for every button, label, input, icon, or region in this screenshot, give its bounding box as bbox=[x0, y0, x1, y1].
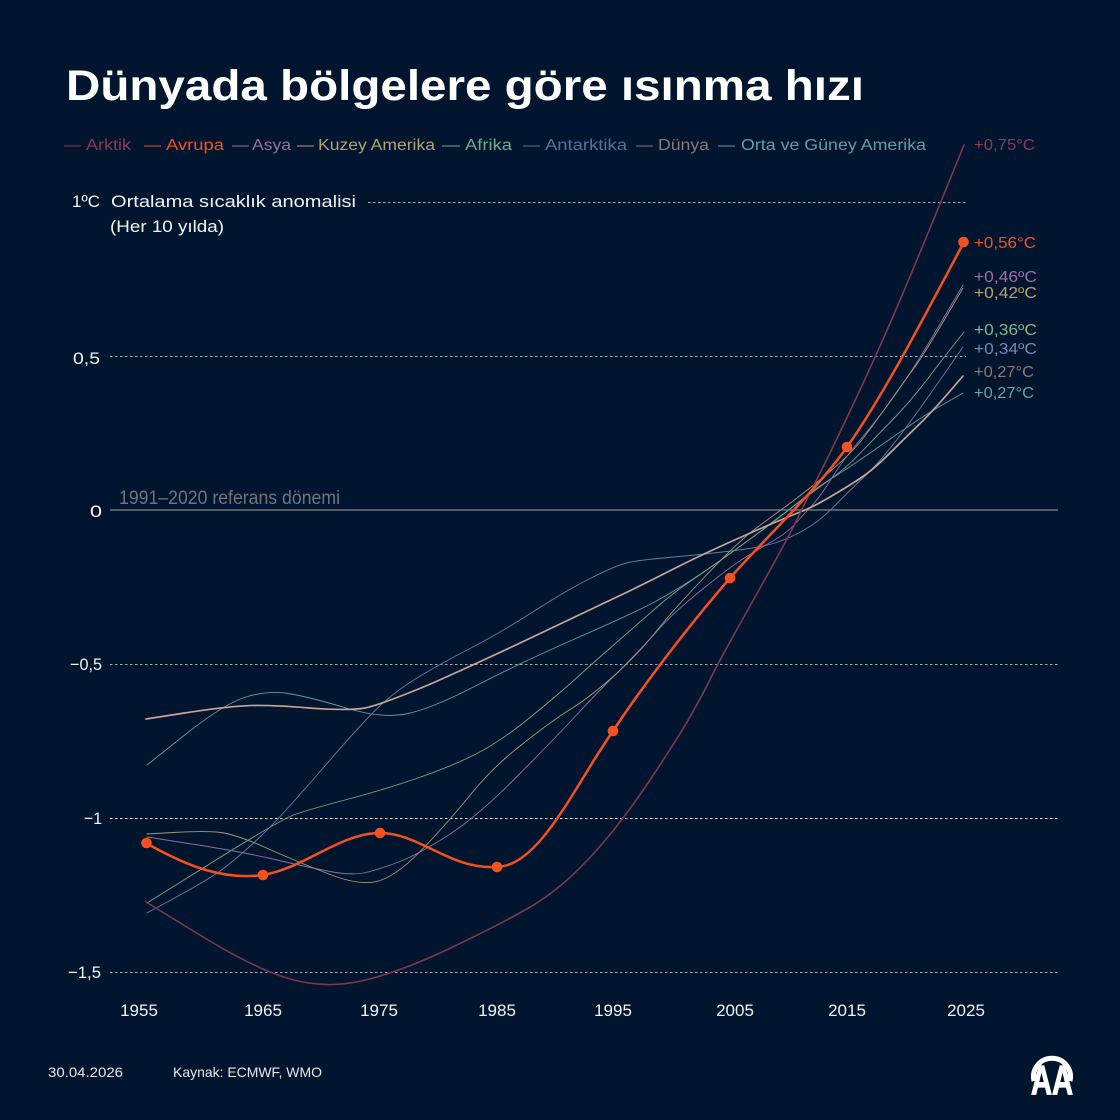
x axis labels: 1995 bbox=[594, 1001, 632, 1020]
end value labels: +0,27°C bbox=[974, 364, 1034, 381]
line: Avrupa bbox=[146, 242, 964, 876]
line: Asya bbox=[147, 285, 963, 874]
legend: Antarktika: Antarktika bbox=[545, 137, 627, 154]
x axis labels: 1985 bbox=[478, 1001, 516, 1020]
line: Orta ve Güney Amerika bbox=[147, 393, 963, 765]
legend: Dünya: Dünya bbox=[658, 137, 709, 154]
data points: Avrupa bbox=[141, 237, 969, 880]
line: Antarktika bbox=[147, 347, 963, 913]
x axis labels: 1975 bbox=[360, 1001, 398, 1020]
legend: Avrupa bbox=[144, 137, 224, 154]
legend: Dünya bbox=[636, 137, 709, 154]
legend: Arktik: Arktik bbox=[86, 137, 131, 154]
title: Dünyada bölgelere göre ısınma hızı bbox=[66, 62, 864, 110]
source: Kaynak: ECMWF, WMO bbox=[173, 1064, 322, 1080]
legend: Afrika bbox=[442, 137, 512, 154]
x axis labels: 2025 bbox=[947, 1001, 985, 1020]
y axis labels: −0,5 bbox=[70, 655, 102, 674]
line: Dünya bbox=[146, 376, 963, 719]
end value labels: +0,42ºC bbox=[974, 285, 1037, 302]
line: Arktik bbox=[146, 145, 964, 985]
legend: Afrika: Afrika bbox=[465, 137, 512, 154]
zero baseline bbox=[110, 509, 1058, 511]
y axis labels bbox=[68, 192, 102, 982]
date: 30.04.2026 bbox=[48, 1064, 123, 1080]
legend: Kuzey Amerika: Kuzey Amerika bbox=[318, 137, 435, 154]
legend: Orta ve Güney Amerika: Orta ve Güney Amerika bbox=[741, 137, 926, 154]
line: Afrika bbox=[147, 332, 964, 903]
y axis title: (Her 10 yılda) bbox=[110, 217, 224, 236]
x axis labels: 2015 bbox=[828, 1001, 866, 1020]
end value labels: +0,56°C bbox=[974, 235, 1036, 252]
end value labels: +0,75°C bbox=[974, 137, 1035, 154]
end value labels: +0,46ºC bbox=[974, 269, 1037, 286]
legend: Asya bbox=[232, 137, 291, 154]
y axis labels: 0 bbox=[90, 502, 102, 521]
y axis labels: −1,5 bbox=[68, 963, 101, 982]
icon: AA logo: AA bbox=[1031, 1057, 1073, 1103]
y axis title: Ortalama sıcaklık anomalisi bbox=[111, 192, 356, 211]
end value labels: +0,36ºC bbox=[974, 322, 1037, 339]
x axis labels: 1955 bbox=[120, 1001, 158, 1020]
y axis labels: −1 bbox=[84, 809, 102, 828]
gridlines bbox=[110, 202, 1058, 972]
legend: Avrupa: Avrupa bbox=[166, 137, 224, 154]
legend: Asya: Asya bbox=[252, 137, 291, 154]
x axis labels: 1965 bbox=[244, 1001, 282, 1020]
y axis labels: 1ºC bbox=[72, 192, 100, 211]
y axis title bbox=[110, 192, 356, 236]
end value labels: +0,34ºC bbox=[974, 341, 1037, 358]
x axis labels bbox=[120, 1001, 985, 1020]
legend bbox=[64, 137, 926, 154]
line chart bbox=[141, 145, 969, 985]
end value labels: +0,27°C bbox=[974, 385, 1034, 402]
end value labels bbox=[974, 137, 1037, 402]
legend: Antarktika bbox=[523, 137, 627, 154]
y axis labels: 0,5 bbox=[73, 349, 100, 368]
line: Kuzey Amerika bbox=[147, 288, 963, 883]
x axis labels: 2005 bbox=[716, 1001, 754, 1020]
legend: Arktik bbox=[64, 137, 131, 154]
baseline label: 1991–2020 referans dönemi bbox=[119, 488, 340, 509]
